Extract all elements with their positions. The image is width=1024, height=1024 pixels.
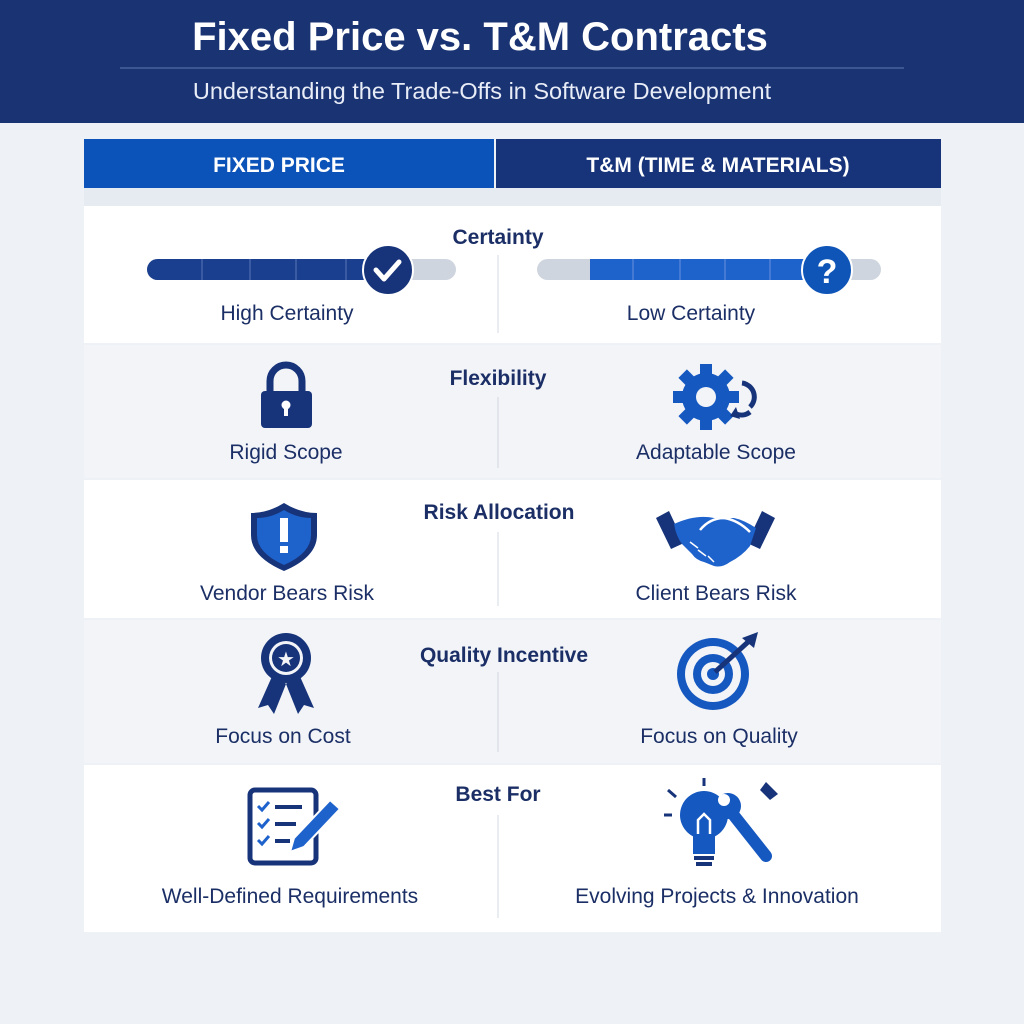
row: flexibility: Rigid Scope bbox=[229, 441, 343, 464]
bar: low certainty bbox=[537, 245, 881, 295]
row: best for: Evolving Projects & Innovation bbox=[575, 885, 859, 908]
bar: high certainty bbox=[147, 245, 456, 295]
icon: shield bbox=[251, 503, 317, 571]
row: risk allocation bbox=[84, 480, 941, 618]
row: quality incentive: Quality Incentive bbox=[420, 644, 588, 667]
header banner bbox=[0, 0, 1024, 123]
row: certainty bbox=[84, 206, 941, 343]
row: quality incentive bbox=[84, 620, 941, 763]
row: certainty: Low Certainty bbox=[627, 302, 756, 325]
subtitle: Understanding the Trade-Offs in Software Development bbox=[193, 78, 772, 104]
icon: gear with arrows bbox=[673, 364, 754, 430]
row: quality incentive: Focus on Cost bbox=[215, 725, 351, 748]
icon: lock bbox=[261, 365, 312, 428]
row: certainty: Certainty bbox=[452, 226, 544, 249]
icon: award ribbon bbox=[258, 633, 314, 714]
column headers bbox=[84, 139, 941, 188]
row: best for: Well-Defined Requirements bbox=[162, 885, 418, 908]
row: best for: Best For bbox=[455, 783, 541, 806]
row: flexibility: Adaptable Scope bbox=[636, 441, 796, 464]
title: Fixed Price vs. T&M Contracts bbox=[192, 15, 768, 59]
row: risk allocation: Vendor Bears Risk bbox=[200, 582, 374, 605]
column headers: T&M (TIME & MATERIALS) bbox=[586, 154, 850, 177]
row: risk allocation: Client Bears Risk bbox=[635, 582, 797, 605]
bar: low certainty: ? bbox=[817, 253, 837, 291]
icon: award ribbon: ★ bbox=[277, 649, 295, 671]
row: risk allocation: Risk Allocation bbox=[424, 501, 574, 524]
icon: checklist with pencil bbox=[250, 790, 340, 863]
row: flexibility: Flexibility bbox=[450, 367, 547, 390]
row: best for bbox=[84, 765, 941, 932]
row: flexibility bbox=[84, 345, 941, 478]
row: quality incentive: Focus on Quality bbox=[640, 725, 798, 748]
column headers: FIXED PRICE bbox=[213, 154, 345, 177]
icon: handshake bbox=[656, 511, 775, 566]
icon: lightbulb and wrench bbox=[664, 778, 778, 866]
row: certainty: High Certainty bbox=[220, 302, 354, 325]
icon: target bbox=[677, 632, 758, 710]
